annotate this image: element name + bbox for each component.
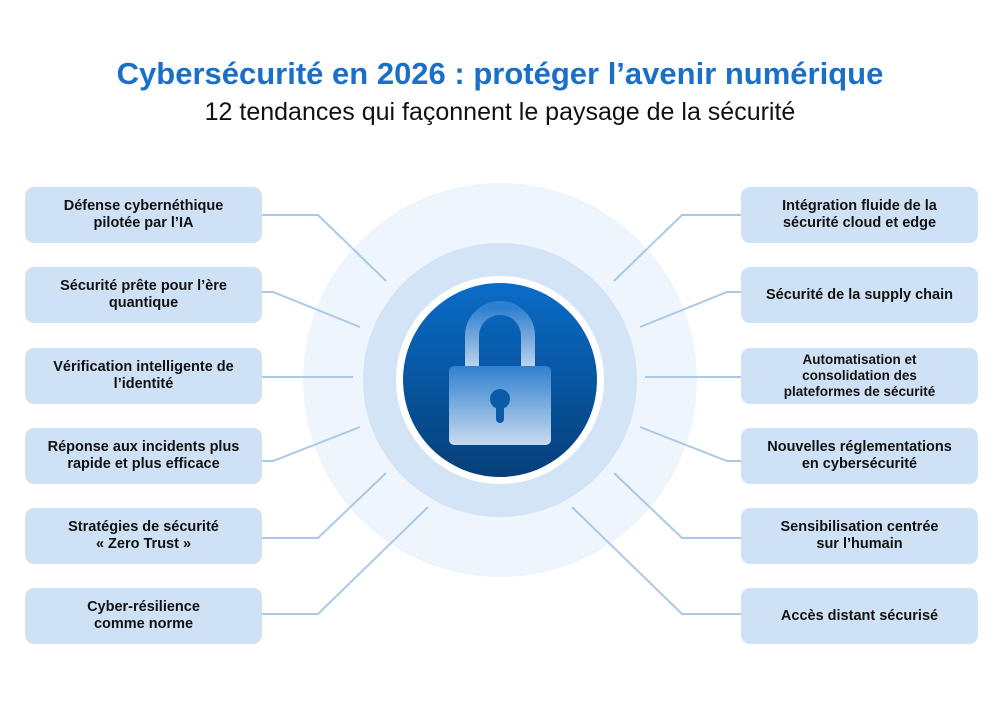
box: right 4: en cybersécurité xyxy=(802,456,917,472)
box: left 1: pilotée par l’IA xyxy=(94,215,193,231)
box: right 5: Sensibilisation centrée xyxy=(781,519,938,535)
box: left 3: l’identité xyxy=(114,376,173,392)
box: right 3: Automatisation et xyxy=(802,352,916,367)
box: left 5: Stratégies de sécurité xyxy=(68,519,219,535)
box: right 5 xyxy=(741,508,978,564)
box: right 1 xyxy=(741,187,978,243)
connector lines xyxy=(262,215,741,614)
box: left 4: rapide et plus efficace xyxy=(67,456,220,472)
box: right 3: plateformes de sécurité xyxy=(784,384,935,399)
box: right 3: consolidation des xyxy=(802,368,917,383)
box: right 6 xyxy=(741,588,978,644)
box: left 4 xyxy=(25,428,262,484)
box: left 1 xyxy=(25,187,262,243)
box: left 3: Vérification intelligente de xyxy=(53,359,234,375)
box: left 4: Réponse aux incidents plus xyxy=(48,439,239,455)
box: right 6: Accès distant sécurisé xyxy=(781,608,938,624)
box: left 6: Cyber-résilience xyxy=(87,599,200,615)
box: left 2 xyxy=(25,267,262,323)
box: left 1: Défense cybernéthique xyxy=(64,198,223,214)
box: left 6 xyxy=(25,588,262,644)
box: right 1: sécurité cloud et edge xyxy=(783,215,936,231)
box: right 4: Nouvelles réglementations xyxy=(767,439,952,455)
box: right 2: Sécurité de la supply chain xyxy=(766,286,953,302)
box: right 2 xyxy=(741,267,978,323)
box: left 6: comme norme xyxy=(94,616,193,632)
box: left 2: Sécurité prête pour l’ère xyxy=(60,278,227,294)
subtitle: 12 tendances qui façonnent le paysage de la sécurité xyxy=(205,98,795,126)
box: left 5: « Zero Trust » xyxy=(96,536,191,552)
box: left 5 xyxy=(25,508,262,564)
title: Cybersécurité en 2026 : protéger l’avenir numérique xyxy=(117,56,883,91)
box: right 4 xyxy=(741,428,978,484)
box: right 1: Intégration fluide de la xyxy=(782,198,937,214)
box: left 3 xyxy=(25,348,262,404)
box: right 3 xyxy=(741,348,978,404)
icon: lock xyxy=(449,308,551,445)
box: right 5: sur l’humain xyxy=(816,536,903,552)
box: left 2: quantique xyxy=(109,295,178,311)
